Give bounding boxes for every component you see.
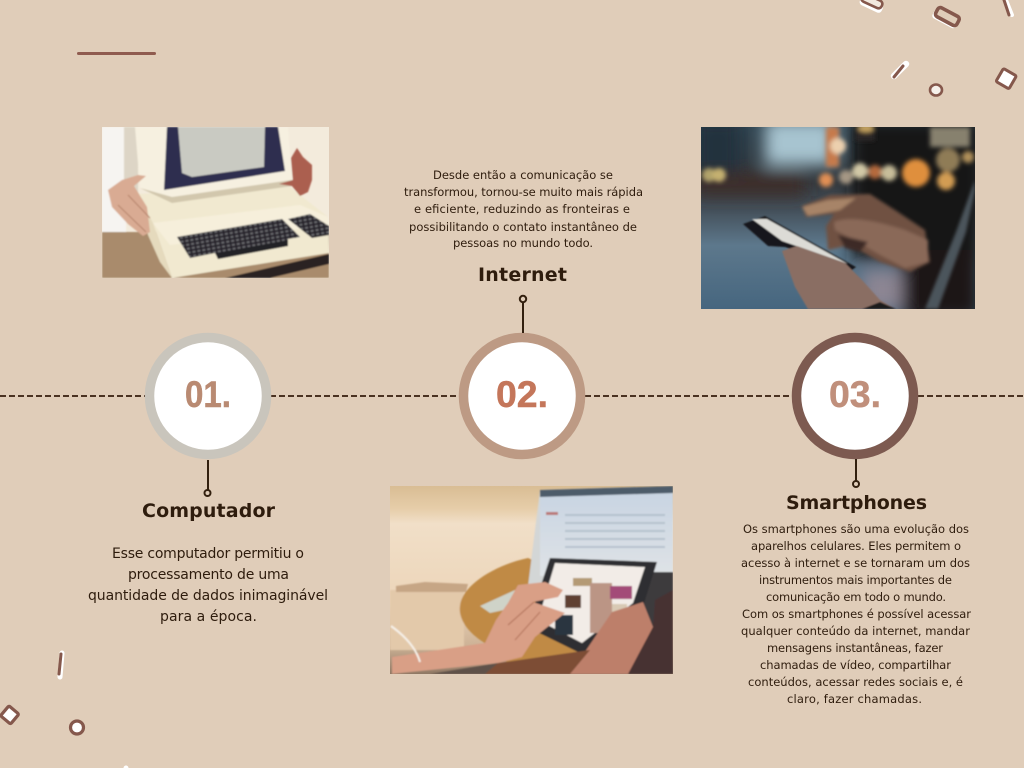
text: Smartphones description: mensagens instantâneas, fazer	[767, 641, 943, 655]
accent line	[77, 52, 156, 55]
photo: vintage computer	[102, 127, 329, 278]
text: Smartphones description: claro, fazer chamadas.	[787, 692, 922, 706]
text: Smartphones description: qualquer conteúdo da internet, mandar	[741, 624, 970, 638]
text: Internet description: pessoas no mundo todo.	[453, 236, 593, 250]
heading: Smartphones: Smartphones	[786, 492, 927, 514]
text: Smartphones description: conteúdos, acessar redes sociais e, é	[748, 675, 963, 689]
photo: hands on smartphone	[701, 127, 975, 309]
text: Smartphones description: Os smartphones são uma evolução dos	[743, 522, 969, 536]
milestone 03 badge	[796, 338, 914, 454]
text: Internet description: transformou, tornou-se muito mais rápida	[404, 185, 643, 199]
photo: tablet and laptop	[390, 486, 673, 674]
text: Computador description: processamento de uma	[128, 567, 289, 583]
text: Internet description: Desde então a comunicação se	[433, 168, 613, 182]
confetti: bottom left	[1, 653, 129, 768]
heading: Computador: Computador	[142, 500, 276, 522]
text: Internet description: e eficiente, reduzindo as fronteiras e	[414, 202, 630, 216]
connector 02	[520, 296, 526, 333]
milestone 01 badge: 01.	[185, 374, 231, 415]
heading: Internet: Internet	[478, 264, 567, 286]
connector 03	[853, 459, 859, 487]
text: Smartphones description: instrumentos mais importantes de	[759, 573, 952, 587]
text: Internet description: possibilitando o contato instantâneo de	[409, 220, 637, 234]
text: Computador description	[88, 546, 328, 625]
text: Smartphones description: Com os smartphones é possível acessar	[742, 607, 971, 621]
connector 01	[204, 460, 210, 496]
confetti: top right	[858, 0, 1016, 95]
text: Smartphones description	[741, 522, 971, 706]
text: Internet description	[404, 168, 643, 250]
text: Smartphones description: chamadas de vídeo, compartilhar	[760, 658, 951, 672]
text: Smartphones description: comunicação em todo o mundo.	[766, 590, 946, 604]
milestone 02 badge: 02.	[496, 374, 548, 415]
milestone 02 badge	[464, 338, 580, 454]
text: Computador description: Esse computador permitiu o	[112, 546, 304, 562]
text: Smartphones description: acesso à internet e se tornaram um dos	[741, 556, 970, 570]
text: Computador description: para a época.	[160, 609, 257, 625]
text: Computador description: quantidade de dados inimaginável	[88, 588, 328, 604]
milestone 03 badge: 03.	[829, 374, 881, 415]
timeline dashed line	[0, 395, 1024, 397]
milestone 01 badge	[150, 338, 266, 454]
text: Smartphones description: aparelhos celulares. Eles permitem o	[751, 539, 961, 553]
